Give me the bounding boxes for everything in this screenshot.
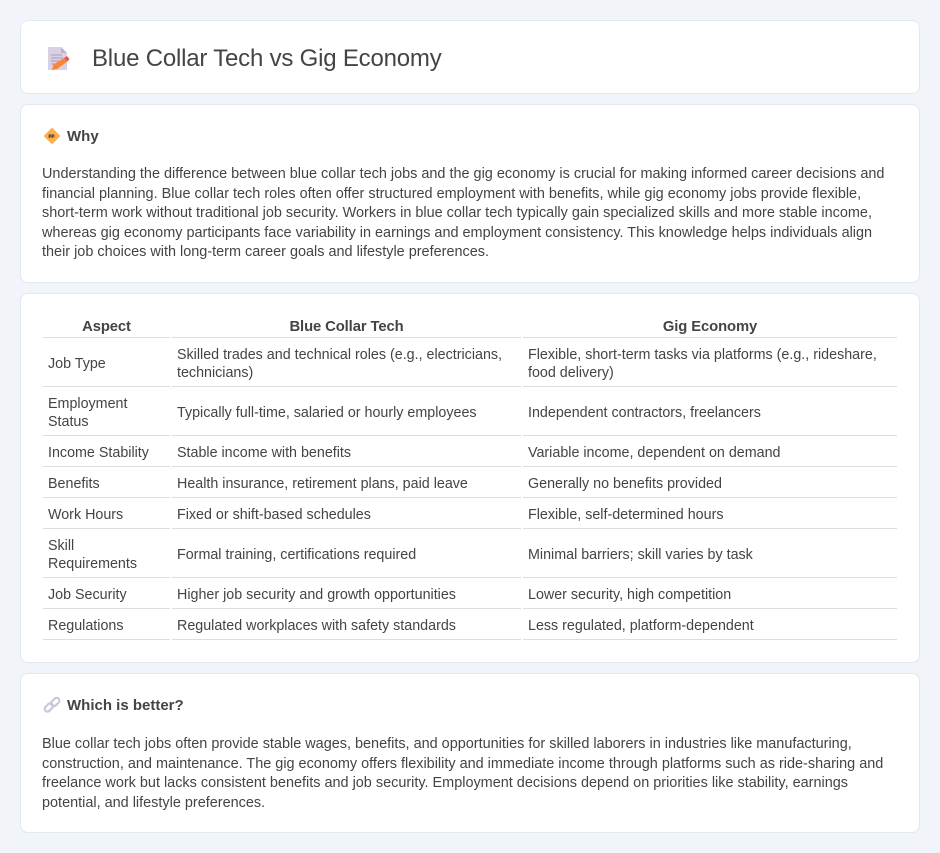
text block: why: whereas gig economy participants face variability in earnings and employment consistency. This knowledge helps individuals align: [42, 225, 872, 241]
icon: diamond sign: [44, 128, 60, 144]
comparison table: Requirements: [48, 556, 137, 572]
comparison table: Lower security, high competition: [528, 587, 731, 603]
comparison table: Benefits: [48, 476, 100, 492]
comparison table: Variable income, dependent on demand: [528, 445, 780, 461]
comparison table: Flexible, short-term tasks via platforms (e.g., rideshare,: [528, 347, 877, 363]
panel: title card: [20, 20, 920, 94]
text block: why: financial planning. Blue collar tech roles often offer structured employment with benefits, while gig economy jobs provide flexible,: [42, 186, 861, 202]
comparison table: Regulated workplaces with safety standards: [177, 618, 456, 634]
comparison table: Regulations: [48, 618, 124, 634]
comparison table: Gig Economy: [663, 319, 757, 335]
comparison table: Higher job security and growth opportunities: [177, 587, 456, 603]
comparison table: Formal training, certifications required: [177, 547, 416, 563]
comparison table: Stable income with benefits: [177, 445, 351, 461]
comparison table: Blue Collar Tech: [289, 319, 404, 335]
panel: why: [20, 104, 920, 283]
text block: which is better: freelance work but lacks consistent benefits and job security. Employment decisions depend on priorities like stability, earnings: [42, 775, 848, 791]
title: Blue Collar Tech vs Gig Economy: [92, 45, 442, 72]
comparison table: Skill: [48, 538, 74, 554]
heading: which is better: Which is better?: [67, 697, 184, 714]
text block: which is better: Blue collar tech jobs often provide stable wages, benefits, and opportunities for skilled laborers in industries like manufacturing,: [42, 736, 852, 752]
comparison table: Independent contractors, freelancers: [528, 405, 761, 421]
comparison table: Minimal barriers; skill varies by task: [528, 547, 753, 563]
comparison table: Status: [48, 414, 89, 430]
comparison table: Aspect: [82, 319, 131, 335]
comparison table: Flexible, self-determined hours: [528, 507, 723, 523]
text block: which is better: [42, 736, 883, 811]
comparison table: Job Type: [48, 356, 106, 372]
comparison table: Generally no benefits provided: [528, 476, 722, 492]
comparison table: [43, 319, 897, 640]
icon: document with pencil: [48, 47, 70, 70]
comparison table: food delivery): [528, 365, 614, 381]
comparison table: Skilled trades and technical roles (e.g., electricians,: [177, 347, 502, 363]
text block: why: short-term work without traditional job security. Workers in blue collar tech typically gain specialized skills and more stable income,: [42, 205, 872, 221]
comparison table: Less regulated, platform-dependent: [528, 618, 754, 634]
comparison table: technicians): [177, 365, 253, 381]
comparison table: Employment: [48, 396, 127, 412]
text block: which is better: construction, and maintenance. The gig economy offers flexibility and immediate income through platforms such as ride-sharing and: [42, 756, 883, 772]
text block: why: Understanding the difference between blue collar tech jobs and the gig economy is crucial for making informed career decisions and: [42, 166, 884, 182]
comparison table: Income Stability: [48, 445, 149, 461]
icon: chain link: [44, 696, 60, 713]
heading: why: Why: [67, 128, 99, 145]
text block: why: [42, 166, 884, 260]
text block: why: their job choices with long-term career goals and lifestyle preferences.: [42, 244, 489, 260]
text block: which is better: potential, and lifestyle preferences.: [42, 795, 265, 811]
panel: which is better: [20, 673, 920, 833]
comparison table: Job Security: [48, 587, 127, 603]
comparison table: Typically full-time, salaried or hourly employees: [177, 405, 477, 421]
comparison table: Health insurance, retirement plans, paid leave: [177, 476, 468, 492]
comparison table: Work Hours: [48, 507, 123, 523]
comparison table: Fixed or shift-based schedules: [177, 507, 371, 523]
panel: comparison table: [20, 293, 920, 663]
